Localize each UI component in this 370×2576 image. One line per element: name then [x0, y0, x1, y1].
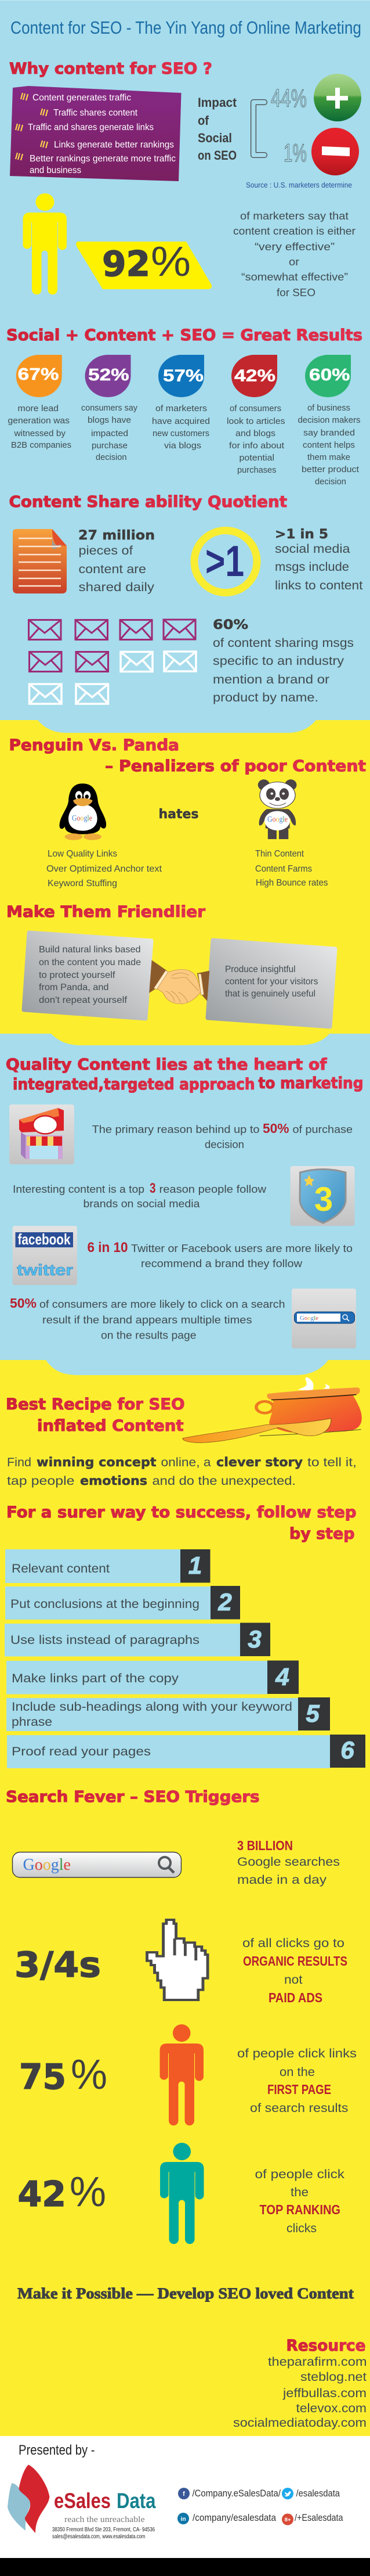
stat: 42 percent — [17, 2169, 106, 2215]
icon: yellow person — [23, 193, 67, 294]
closing line: Make it Possible — Develop SEO loved Content — [17, 2285, 354, 2302]
stat drop: 67 percent — [16, 355, 62, 397]
stat drop: 60 percent — [305, 355, 351, 397]
step 1: Relevant content — [12, 1562, 110, 1575]
caption: 60 percent: decision — [315, 477, 346, 487]
caption: 60 percent: of business — [307, 403, 350, 413]
stat: more than 1 in 5: links to content — [275, 579, 363, 592]
list text: Traffic shares content — [53, 108, 138, 118]
step 4 — [6, 1661, 299, 1694]
stat: more than 1 in 5 — [275, 527, 363, 592]
presented by: Presented by - — [19, 2442, 95, 2458]
stat: 27 million: content are — [79, 563, 146, 576]
resources: Resource — [286, 2337, 365, 2355]
bottom black band — [0, 2558, 370, 2576]
card: natural links — [24, 933, 151, 1019]
list text: and business — [30, 166, 81, 175]
heading: follow step by step: For a surer way to success, follow step — [6, 1503, 356, 1521]
text: 50 percent purchase: decision — [205, 1139, 244, 1150]
stat: 27 million: shared daily — [79, 581, 155, 594]
stat drop: 42 percent: 42% — [234, 367, 275, 386]
card: shield icon: 3 — [314, 1181, 333, 1218]
logo: eSales Data: eSales — [54, 2489, 111, 2513]
caption: 42 percent — [227, 404, 285, 475]
icon: google search box: Google — [23, 1855, 71, 1874]
bracket — [253, 102, 264, 155]
caption: 52 percent: consumers say — [81, 403, 137, 413]
stat: 27 million — [78, 528, 155, 594]
stat: 60 percent messages: 60% — [213, 618, 248, 632]
text: 6 in 10: Twitter or Facebook users are more likely to — [131, 1243, 353, 1254]
stat: more than 1 in 5: msgs include — [275, 560, 349, 574]
caption: 60 percent: decision makers — [298, 415, 361, 425]
stat: 92 percent badge — [76, 239, 212, 289]
caption: 60 percent — [298, 403, 361, 487]
logo: eSales Data: reach the unreachable — [64, 2515, 145, 2524]
icon: penguin — [59, 783, 106, 840]
list: panda hates: Thin Content — [255, 849, 304, 859]
icon: panda — [258, 779, 296, 839]
step 3 — [5, 1622, 270, 1656]
text: find winning concept: Find — [7, 1456, 31, 1469]
stat: 60 percent messages — [213, 618, 354, 704]
step 5: Include sub-headings along with your keyword — [12, 1700, 292, 1714]
stat: 3 billion: Google searches — [237, 1855, 340, 1869]
section background: blue quality content — [0, 1034, 370, 1361]
impact of social on SEO label: Social — [198, 131, 232, 145]
stat drop: 52 percent — [85, 355, 131, 397]
step 2 — [5, 1586, 240, 1620]
heading: quality content — [6, 1056, 363, 1093]
icon: greater than one ring: >1 — [205, 537, 244, 585]
list text: Traffic and shares generate links — [28, 123, 154, 132]
card: natural links: from Panda, and — [39, 983, 109, 992]
stat: 42 percent: 42 — [17, 2174, 66, 2215]
logo: eSales Data — [8, 2465, 156, 2540]
icon: teal person — [160, 2143, 204, 2244]
text: 50 percent purchase: 50% — [263, 1121, 289, 1136]
icon: minus ball — [311, 128, 359, 175]
stat: 27 million: 27 million — [78, 528, 155, 543]
heading: best recipe: Best Recipe for SEO — [6, 1395, 184, 1413]
social: google plus: 8+ — [285, 2517, 291, 2523]
icon: greater than one ring — [194, 531, 257, 592]
text: marketers say: content creation is either — [233, 225, 356, 237]
text: 50 percent consumers: of consumers are more likely to click on a search — [39, 1298, 285, 1310]
list: panda hates: Content Farms — [255, 864, 312, 874]
text: find winning concept: tap people — [7, 1474, 74, 1488]
caption: 42 percent: purchases — [237, 465, 276, 475]
caption: 67 percent: witnessed by — [13, 429, 66, 438]
impact of social on SEO label: on SEO — [198, 148, 237, 163]
stat: 75 percent — [19, 2052, 107, 2098]
card: facebook and twitter logos: twitter — [17, 1261, 74, 1279]
yellow tab into blue — [51, 1034, 329, 1045]
list: penguin hates — [46, 849, 162, 888]
impact of social on SEO label — [198, 95, 237, 163]
text: first page: of search results — [250, 2102, 348, 2115]
list: penguin hates: Over Optimized Anchor text — [46, 864, 162, 874]
label: hates: hates — [159, 807, 198, 822]
bullet marks — [16, 93, 48, 160]
caption: 57 percent: via blogs — [164, 441, 201, 451]
text: organic results: of all clicks go to — [242, 1937, 344, 1950]
text: 50 percent purchase — [92, 1121, 353, 1150]
card: insightful content: Produce insightful — [225, 965, 296, 974]
text: 6 in 10: 6 in 10 — [87, 1240, 128, 1255]
step 2: Put conclusions at the beginning — [10, 1598, 199, 1611]
text: first page: on the — [280, 2066, 315, 2079]
text: organic results: ORGANIC RESULTS — [243, 1953, 347, 1969]
step 4: 4 — [275, 1663, 289, 1690]
heading: best recipe — [6, 1395, 184, 1435]
icon: pot and spoon — [183, 1377, 362, 1442]
text: find winning concept: online, a — [161, 1456, 211, 1469]
step 6: 6 — [340, 1736, 354, 1764]
caption: 42 percent: look to articles — [227, 416, 285, 426]
step 6 — [7, 1735, 365, 1768]
step 4: Make links part of the copy — [12, 1672, 179, 1685]
heading: why content: Why content for SEO ? — [9, 60, 212, 78]
footer background — [0, 2436, 370, 2558]
stat: 60 percent messages: specific to an industry — [213, 654, 344, 668]
social: twitter: /esalesdata — [296, 2488, 340, 2499]
text: marketers say — [233, 210, 356, 298]
stat drop: 57 percent — [158, 355, 204, 397]
stat drop: 52 percent: 52% — [88, 366, 129, 384]
caption: 60 percent: content helps — [303, 440, 355, 450]
text: first page: FIRST PAGE — [267, 2082, 331, 2097]
icon: pointer hand — [147, 1920, 208, 2000]
social: linkedin: in — [180, 2516, 186, 2523]
card: natural links: on the content you made — [39, 958, 141, 967]
stat: 27 million: pieces of — [79, 544, 133, 557]
source: Source : U.S. marketers determine — [246, 181, 352, 189]
caption: 52 percent — [81, 403, 137, 462]
heading: follow step by step: by step — [289, 1525, 355, 1543]
blue tab into yellow — [38, 720, 316, 733]
text: marketers say: “somewhat effective” — [241, 271, 348, 283]
heading: best recipe: inflated Content — [37, 1417, 184, 1435]
card: store icon — [9, 1104, 74, 1164]
social: linkedin: /company/esalesdata — [193, 2512, 276, 2523]
section background: blue top — [0, 0, 370, 721]
text: 50 percent purchase: of purchase — [292, 1124, 353, 1135]
card: facebook and twitter logos: facebook — [17, 1231, 71, 1248]
resources — [233, 2337, 367, 2430]
text: top ranking — [255, 2168, 345, 2235]
stat: 92 percent badge: 92 — [102, 244, 150, 285]
list text: Better rankings generate more traffic — [30, 154, 176, 164]
logo: eSales Data: sales@esalesdata.com, www.esalesdata.com — [52, 2534, 145, 2540]
text: 50 percent consumers: on the results page — [101, 1330, 196, 1341]
social: facebook: f — [183, 2491, 185, 2498]
social: twitter — [282, 2488, 340, 2499]
caption: 52 percent: blogs have — [88, 415, 131, 425]
stat: 60 percent messages: product by name. — [213, 691, 318, 704]
heading: follow step by step — [6, 1503, 356, 1543]
list text: Links generate better rankings — [54, 140, 174, 150]
text: 50 percent consumers — [10, 1296, 285, 1341]
logo: eSales Data: Data — [117, 2489, 156, 2513]
stat: 3 billion — [237, 1838, 340, 1887]
resources: jeffbullas.com — [282, 2387, 367, 2400]
text: first page — [237, 2047, 357, 2115]
step 3: 3 — [248, 1625, 262, 1653]
caption: 57 percent: of marketers — [155, 404, 207, 413]
icon: plus ball — [314, 74, 361, 121]
stat: 44 percent: 44% — [271, 84, 307, 113]
caption: 60 percent: better product — [302, 465, 360, 474]
caption: 52 percent: decision — [96, 452, 126, 462]
stat: 75 percent: 75 — [19, 2057, 66, 2098]
caption: 67 percent: more lead — [17, 404, 59, 413]
heading: search fever: Search Fever – SEO Triggers — [6, 1788, 260, 1806]
stat: 92 percent badge: % — [151, 239, 191, 285]
card: natural links: don't repeat yourself — [39, 995, 128, 1005]
list: panda hates: High Bounce rates — [256, 878, 328, 888]
text: top ranking: clicks — [286, 2222, 317, 2235]
stat drop: 42 percent — [231, 355, 277, 397]
card: facebook and twitter logos — [13, 1226, 77, 1285]
stat: three quarters: 3/4s — [14, 1945, 101, 1985]
caption: 57 percent: new customers — [153, 429, 209, 438]
card: small search bar — [292, 1289, 356, 1348]
text: marketers say: for SEO — [277, 287, 315, 298]
step 5: phrase — [12, 1715, 52, 1729]
caption: 57 percent — [152, 404, 210, 451]
step 3: Use lists instead of paragraphs — [10, 1634, 199, 1647]
resources: socialmediatoday.com — [233, 2416, 367, 2430]
heading: share ability: Content Share ability Quotient — [9, 493, 287, 511]
caption: 67 percent: generation was — [8, 416, 70, 426]
caption: 42 percent: for info about — [229, 441, 285, 451]
blue tab into yellow — [46, 1360, 328, 1375]
text: top 3 reason — [13, 1181, 267, 1210]
step 1 — [5, 1549, 210, 1583]
stat: 1 percent: 1% — [284, 139, 307, 167]
caption: 42 percent: potential — [239, 453, 274, 463]
heading: quality content: Quality Content lies at the heart of — [6, 1056, 327, 1074]
stat: 3 billion: made in a day — [237, 1873, 327, 1887]
icon: panda: Google — [267, 815, 288, 824]
list: penguin hates: Low Quality Links — [48, 849, 117, 859]
text: marketers say: of marketers say that — [240, 210, 349, 222]
text: marketers say: or — [289, 256, 299, 268]
social: facebook: /Company.eSalesData/ — [193, 2488, 281, 2499]
text: find winning concept: emotions — [80, 1474, 147, 1488]
stat: 60 percent messages: of content sharing msgs — [213, 636, 354, 650]
list: panda hates — [255, 849, 328, 888]
text: top 3 reason: Interesting content is a top — [13, 1183, 144, 1195]
social: google plus — [282, 2512, 343, 2525]
heading: make them friendlier: Make Them Friendlier — [6, 903, 206, 921]
text: organic results — [242, 1937, 347, 2005]
social: google plus: /+Esalesdata — [295, 2512, 343, 2523]
text: top 3 reason: brands on social media — [84, 1198, 201, 1210]
heading: quality content: integrated,targeted approach — [13, 1075, 255, 1093]
text: top ranking: of people click — [255, 2168, 345, 2181]
card: small search bar: Google — [300, 1315, 318, 1322]
card: insightful content: content for your visitors — [225, 977, 318, 987]
card: insightful content: that is genuinely useful — [225, 989, 315, 999]
caption: 52 percent: purchase — [92, 441, 128, 451]
icon: handshake — [149, 960, 209, 1004]
section background: yellow penguin and friendlier — [0, 720, 370, 1034]
text: find winning concept: and do the unexpected. — [152, 1474, 296, 1488]
caption: 52 percent: impacted — [91, 429, 128, 438]
stat: more than 1 in 5: >1 in 5 — [275, 527, 328, 542]
list text: Content generates traffic — [32, 93, 131, 103]
text: top 3 reason: 3 — [150, 1181, 155, 1196]
caption: 42 percent: of consumers — [230, 404, 281, 413]
heading: penguin vs panda — [9, 736, 366, 775]
stat drop: 57 percent: 57% — [163, 367, 204, 386]
text: find winning concept: winning concept — [37, 1455, 157, 1469]
text: find winning concept — [7, 1455, 357, 1488]
heading: great results: Social + Content + SEO = Great Results — [6, 326, 362, 344]
heading: penguin vs panda: Penguin Vs. Panda — [9, 736, 179, 754]
resources: theparafirm.com — [268, 2355, 367, 2369]
caption: 67 percent — [8, 404, 71, 450]
text: 50 percent consumers: 50% — [10, 1296, 37, 1311]
icon: orange person — [160, 2024, 204, 2125]
logo: eSales Data: 38350 Fremont Blvd Ste 203, Fremont, CA- 94536 — [52, 2527, 155, 2533]
step 5 — [6, 1697, 330, 1731]
stat drop: 60 percent: 60% — [309, 366, 350, 384]
text: 6 in 10: recommend a brand they follow — [141, 1258, 303, 1269]
text: find winning concept: clever story — [216, 1455, 303, 1469]
text: top ranking: TOP RANKING — [260, 2202, 340, 2217]
text: find winning concept: to tell it, — [307, 1456, 357, 1469]
heading: penguin vs panda: – Penalizers of poor Content — [105, 757, 366, 775]
resources: steblog.net — [300, 2370, 367, 2384]
panel: purple list — [10, 86, 181, 181]
text: organic results: PAID ADS — [269, 1990, 322, 2005]
text: marketers say: “very effective” — [255, 241, 335, 253]
text: 50 percent consumers: result if the brand appears multiple times — [42, 1314, 252, 1326]
stat drop: 67 percent: 67% — [17, 365, 59, 384]
caption: 57 percent: have acquired — [152, 416, 210, 426]
card: natural links: Build natural links based — [39, 945, 140, 955]
icon grid: envelopes, six of ten highlighted — [29, 620, 196, 704]
text: top 3 reason: reason people follow — [159, 1183, 267, 1195]
caption: 67 percent: B2B companies — [11, 440, 71, 450]
text: 50 percent purchase: The primary reason behind up to — [92, 1124, 260, 1135]
step 2: 2 — [217, 1588, 232, 1616]
icon: penguin: Google — [72, 814, 92, 823]
list text — [28, 93, 176, 175]
stat: 42 percent: % — [70, 2169, 106, 2215]
stat: 75 percent: % — [71, 2052, 107, 2098]
list: penguin hates: Keyword Stuffing — [48, 879, 117, 888]
stat: more than 1 in 5: social media — [275, 542, 350, 556]
icon: document — [13, 529, 67, 593]
step 6: Proof read your pages — [12, 1745, 151, 1758]
caption: 60 percent: say branded — [303, 428, 355, 438]
heading: quality content: to marketing — [259, 1074, 363, 1092]
card: natural links: to protect yourself — [39, 970, 115, 980]
impact of social on SEO label: of — [198, 113, 209, 128]
text: organic results: not — [284, 1973, 303, 1987]
stat: 3 billion: 3 BILLION — [237, 1838, 293, 1853]
card: shield icon — [290, 1166, 355, 1226]
step 1: 1 — [188, 1552, 202, 1579]
impact of social on SEO label: Impact — [198, 95, 237, 110]
step 5: 5 — [306, 1700, 320, 1727]
stat: 60 percent messages: mention a brand or — [213, 673, 329, 686]
caption: 60 percent: them make — [307, 452, 350, 462]
card: insightful content — [208, 940, 335, 1027]
text: 6 in 10 — [87, 1240, 353, 1269]
icon: google search box — [13, 1852, 181, 1877]
text: top ranking: the — [291, 2186, 309, 2199]
caption: 42 percent: and blogs — [235, 429, 275, 438]
resources: televox.com — [296, 2402, 367, 2415]
section background: yellow recipe and triggers — [0, 1360, 370, 2436]
text: first page: of people click links — [237, 2047, 357, 2060]
